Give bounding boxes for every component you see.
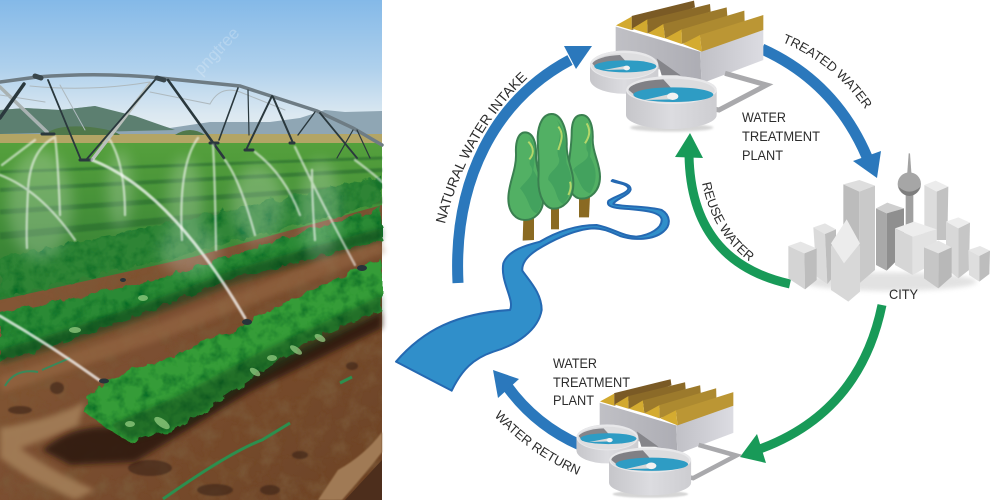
- tree: left: [508, 132, 543, 241]
- pivot irrigation structure: [0, 75, 382, 160]
- main crop row: [82, 260, 382, 442]
- arrow: city to lower plant: [740, 305, 882, 463]
- green field: [0, 143, 382, 300]
- crop row 3: [0, 176, 382, 298]
- crop shadow: [42, 312, 382, 465]
- panel: irrigation photo: [0, 0, 382, 500]
- field rows: [0, 158, 382, 236]
- label: city: CITY: [889, 286, 919, 302]
- label: natural water intake: NATURAL WATER INTAKE: [436, 72, 528, 223]
- arrow: water return: [493, 370, 580, 445]
- label: treated water: TREATED WATER: [785, 34, 872, 109]
- label: lower water treatment plant: TREATMENT: [553, 374, 630, 390]
- label: upper water treatment plant: TREATMENT: [742, 128, 820, 144]
- puddle left: [0, 402, 95, 500]
- label: reuse water: REUSE WATER: [702, 182, 754, 262]
- tv tower: [898, 153, 921, 225]
- soil clods: [8, 362, 358, 496]
- arrow: natural water intake: [458, 46, 592, 283]
- hose: right: [340, 377, 352, 383]
- far tree line: [45, 126, 205, 135]
- hose: left: [5, 358, 70, 386]
- icon: upper water treatment plant: [590, 1, 767, 132]
- label: lower water treatment plant: WATER: [553, 355, 597, 371]
- icon: lower water treatment plant: [576, 379, 736, 498]
- label: upper water treatment plant: WATER: [742, 109, 786, 125]
- label: lower water treatment plant: [553, 355, 630, 408]
- soil ground: [0, 143, 382, 500]
- water sprays: [0, 137, 382, 380]
- soil ridge: [0, 245, 382, 385]
- arrow: reuse water: [675, 133, 790, 284]
- arrow: treated water: [762, 49, 881, 178]
- hose: front: [163, 423, 290, 499]
- watermark: pngtree: [190, 24, 243, 79]
- tree: middle: [538, 114, 573, 229]
- mist clouds: [8, 150, 340, 275]
- sky: [0, 0, 382, 135]
- distant crop band: [0, 134, 382, 145]
- panel: water cycle diagram: [394, 0, 990, 498]
- crop row 2: [0, 208, 382, 362]
- puddle right: [318, 432, 382, 500]
- label: upper water treatment plant: PLANT: [742, 147, 783, 163]
- label: upper water treatment plant: [742, 109, 820, 163]
- icon: trees: [508, 114, 600, 241]
- main row shade: [110, 295, 382, 440]
- label: lower water treatment plant: PLANT: [553, 392, 594, 408]
- mountains: [0, 106, 382, 136]
- icon: city: [788, 153, 990, 302]
- icon: river: [396, 180, 669, 391]
- tree: right: [568, 115, 600, 217]
- label: water return: WATER RETURN: [496, 410, 580, 475]
- dark soil corner: [345, 460, 382, 500]
- leaf highlights: [69, 295, 327, 431]
- sprinkler heads: [99, 265, 367, 384]
- row 2 shade: [0, 228, 382, 364]
